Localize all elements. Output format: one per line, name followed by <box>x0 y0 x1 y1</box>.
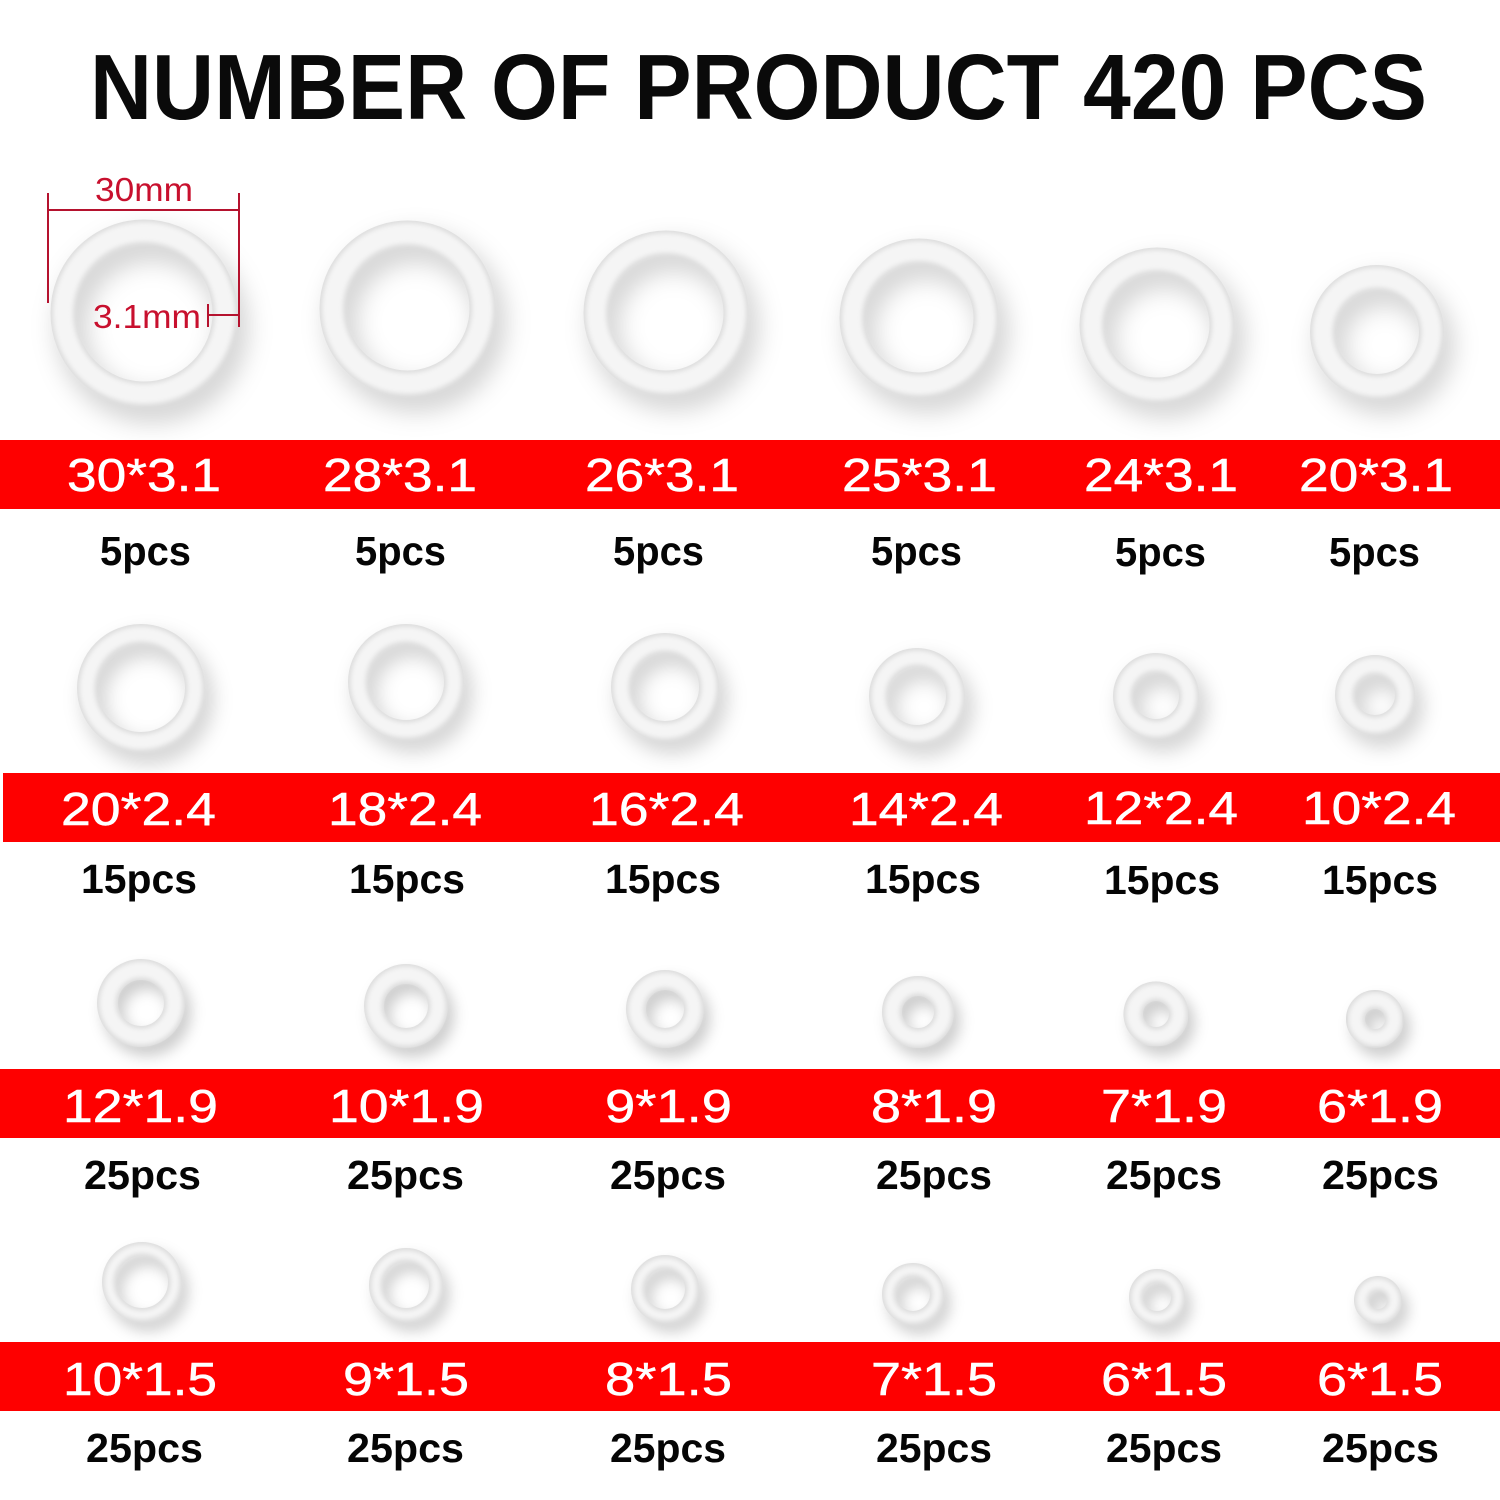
size label: 12*2.4 <box>1084 782 1238 834</box>
red size bar <box>0 1342 1500 1411</box>
size label: 10*2.4 <box>1302 782 1456 834</box>
quantity: 25pcs <box>347 1152 464 1198</box>
size label: 12*1.9 <box>63 1080 218 1132</box>
size label: 26*3.1 <box>585 449 739 501</box>
quantity: 5pcs <box>355 528 446 574</box>
quantity: 25pcs <box>1322 1425 1439 1471</box>
quantity: 25pcs <box>84 1152 201 1198</box>
quantity: 25pcs <box>1106 1425 1222 1471</box>
size label: 20*2.4 <box>61 783 216 835</box>
quantity: 15pcs <box>81 856 197 902</box>
panel: row 1 <box>0 232 1500 575</box>
size label: 16*2.4 <box>589 783 744 835</box>
size label: 28*3.1 <box>323 449 477 501</box>
panel: row 2 <box>3 634 1500 903</box>
quantity: 25pcs <box>86 1425 203 1471</box>
quantity: 5pcs <box>871 528 962 574</box>
ring 6*1.9 <box>1356 1000 1400 1048</box>
ring 18*2.4 <box>358 634 461 741</box>
ring 10*2.4 <box>1345 665 1412 736</box>
ring 9*1.5 <box>376 1255 442 1324</box>
quantity: 25pcs <box>876 1425 992 1471</box>
thickness label: 3.1mm <box>93 298 201 335</box>
ring 30*3.1 <box>63 232 233 408</box>
ring 26*3.1 <box>596 243 744 396</box>
ring 14*2.4 <box>878 658 962 746</box>
red size bar <box>0 1069 1500 1138</box>
ring 28*3.1 <box>332 234 491 397</box>
quantity: 25pcs <box>1322 1152 1439 1198</box>
quantity: 15pcs <box>605 856 721 902</box>
quantity: 15pcs <box>1104 857 1220 903</box>
quantity: 15pcs <box>865 856 981 902</box>
ring 20*2.4 <box>87 634 202 753</box>
size label: 6*1.5 <box>1101 1353 1227 1405</box>
quantity: 25pcs <box>610 1152 726 1198</box>
ring 8*1.5 <box>638 1262 698 1325</box>
size label: 18*2.4 <box>328 783 482 835</box>
title: NUMBER OF PRODUCT 420 PCS <box>90 35 1427 139</box>
quantity: 5pcs <box>100 528 191 574</box>
panel: row 4 <box>0 1249 1500 1471</box>
ring 25*3.1 <box>852 251 994 398</box>
size label: 7*1.5 <box>871 1353 997 1405</box>
ring 7*1.5 <box>889 1270 943 1327</box>
ring 12*1.9 <box>108 970 180 1046</box>
ring 10*1.9 <box>374 974 444 1047</box>
size label: 9*1.5 <box>343 1353 469 1405</box>
size label: 30*3.1 <box>67 449 221 501</box>
size label: 8*1.9 <box>871 1080 997 1132</box>
dimension annotation <box>48 171 239 335</box>
quantity: 15pcs <box>1322 857 1438 903</box>
red size bar <box>3 773 1500 842</box>
size label: 9*1.9 <box>605 1080 732 1132</box>
ring 24*3.1 <box>1092 260 1230 403</box>
ring 8*1.9 <box>892 986 950 1047</box>
panel: row 3 <box>0 970 1500 1198</box>
ring 12*2.4 <box>1123 663 1196 740</box>
quantity: 25pcs <box>876 1152 992 1198</box>
red size bar <box>0 440 1500 509</box>
quantity: 5pcs <box>1115 529 1206 575</box>
quantity: 15pcs <box>349 856 465 902</box>
size label: 7*1.9 <box>1101 1080 1227 1132</box>
size label: 14*2.4 <box>849 783 1003 835</box>
size label: 10*1.9 <box>329 1080 484 1132</box>
size label: 6*1.5 <box>1317 1353 1443 1405</box>
size label: 8*1.5 <box>605 1353 732 1405</box>
ring 20*3.1 <box>1322 278 1440 400</box>
ring 7*1.9 <box>1133 991 1185 1046</box>
width label: 30mm <box>95 171 193 208</box>
quantity: 25pcs <box>1106 1152 1222 1198</box>
ring 10*1.5 <box>109 1249 181 1324</box>
quantity: 5pcs <box>613 528 704 574</box>
size label: 24*3.1 <box>1084 449 1238 501</box>
ring 6*1.5 <box>1136 1276 1184 1327</box>
ring 6*1.5 small <box>1362 1284 1400 1326</box>
size label: 25*3.1 <box>842 449 997 501</box>
size label: 20*3.1 <box>1299 449 1453 501</box>
ring 16*2.4 <box>621 643 716 742</box>
ring 9*1.9 <box>636 980 700 1047</box>
size label: 6*1.9 <box>1317 1080 1443 1132</box>
quantity: 5pcs <box>1329 529 1420 575</box>
quantity: 25pcs <box>610 1425 726 1471</box>
size label: 10*1.5 <box>63 1353 217 1405</box>
quantity: 25pcs <box>347 1425 464 1471</box>
